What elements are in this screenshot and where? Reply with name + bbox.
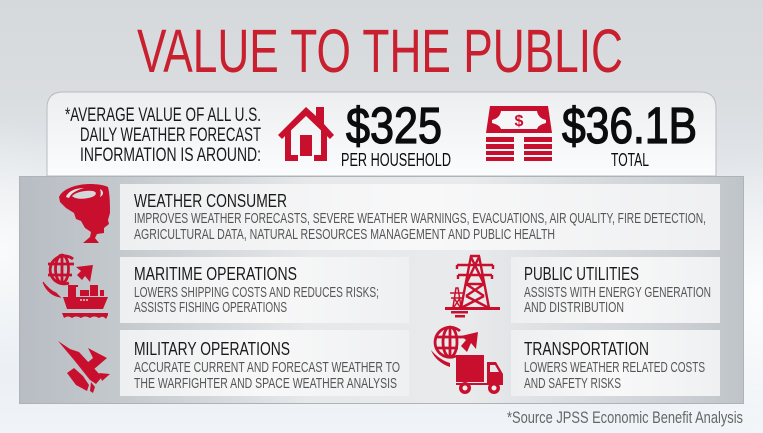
text: average value statement: DAILY WEATHER FORECAST xyxy=(80,125,261,146)
box: military operations: THE WARFIGHTER AND SPACE WEATHER ANALYSIS xyxy=(134,375,397,392)
icon: house xyxy=(278,107,334,161)
text: average value statement: *AVERAGE VALUE OF ALL U.S. xyxy=(65,105,261,126)
icon: money stack xyxy=(486,106,552,161)
icon: transmission towers xyxy=(445,256,500,318)
stat: per household: PER HOUSEHOLD xyxy=(341,150,451,170)
panel: beneficiaries xyxy=(20,176,744,404)
box: maritime operations: ASSISTS FISHING OPERATIONS xyxy=(134,299,287,316)
box: weather consumer xyxy=(120,184,720,250)
box: military operations: ACCURATE CURRENT AND FORECAST WEATHER TO xyxy=(134,359,400,376)
box: maritime operations: MARITIME OPERATIONS xyxy=(134,264,297,284)
icon: globe and ship xyxy=(43,255,108,319)
stat: total xyxy=(562,97,697,170)
box: transportation: AND SAFETY RISKS xyxy=(524,375,621,392)
box: transportation: TRANSPORTATION xyxy=(524,339,649,359)
icon: globe and truck xyxy=(431,327,503,394)
icon: fighter jets xyxy=(58,341,110,393)
box: public utilities: PUBLIC UTILITIES xyxy=(524,264,639,284)
stat: total: $36.1B xyxy=(562,97,697,154)
icon: money stack: $ xyxy=(515,113,524,130)
stat: total: TOTAL xyxy=(611,150,649,170)
stat: per household: $325 xyxy=(346,97,442,154)
icon: tornado xyxy=(59,184,110,243)
box: weather consumer: WEATHER CONSUMER xyxy=(134,191,287,211)
box: maritime operations xyxy=(120,257,409,323)
box: maritime operations: LOWERS SHIPPING COSTS AND REDUCES RISKS; xyxy=(134,284,379,301)
box: weather consumer: AGRICULTURAL DATA, NATURAL RESOURCES MANAGEMENT AND PUBLIC HEALTH xyxy=(134,226,555,243)
box: public utilities: AND DISTRIBUTION xyxy=(524,299,624,316)
box: military operations xyxy=(120,330,409,396)
box: public utilities xyxy=(511,257,720,323)
box: military operations: MILITARY OPERATIONS xyxy=(134,339,290,359)
text: average value statement: INFORMATION IS AROUND: xyxy=(80,145,261,166)
text: average value statement xyxy=(65,105,261,166)
box: transportation xyxy=(511,330,720,396)
panel: average value summary xyxy=(47,92,716,176)
